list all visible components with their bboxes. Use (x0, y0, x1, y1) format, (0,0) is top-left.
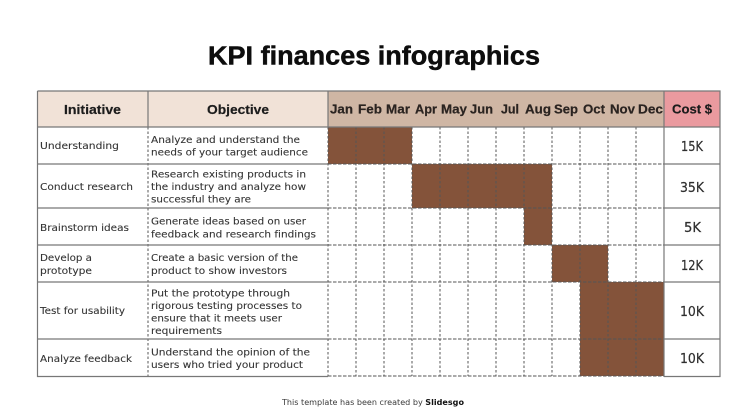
initiative column: Understanding (40, 141, 119, 152)
initiative column: Test for usability (39, 306, 125, 317)
objective column: Analyze and understand the (151, 135, 300, 146)
objective column: Create a basic version of the (151, 253, 298, 264)
cost column (680, 140, 704, 367)
cost column: 10K (680, 305, 704, 320)
header row: Sep (554, 102, 578, 116)
gantt bars (328, 127, 664, 376)
header row: Nov (610, 102, 635, 116)
initiative column: Brainstorm ideas (40, 223, 129, 234)
header row: Mar (386, 102, 410, 116)
initiative column: prototype (40, 266, 92, 277)
objective column: Put the prototype through (151, 288, 290, 300)
cost column: 35K (680, 181, 704, 196)
objective column: Generate ideas based on user (151, 216, 307, 228)
objective column: product to show investors (151, 266, 287, 277)
cost column: 12K (681, 259, 703, 274)
table borders (38, 91, 720, 376)
header row: Jun (470, 102, 493, 116)
header row: Initiative (64, 102, 121, 117)
header row: May (441, 102, 467, 116)
objective column: Understand the opinion of the (151, 348, 310, 358)
objective column: ensure that it meets user (151, 314, 283, 324)
header row: Jan (330, 102, 353, 116)
objective column: users who tried your product (151, 360, 303, 371)
panel: gantt table (38, 91, 720, 376)
objective column: requirements (151, 326, 222, 337)
initiative column: Analyze feedback (40, 354, 132, 365)
objective column: Research existing products in (151, 170, 306, 180)
dashed grid (148, 127, 664, 376)
header row: Aug (525, 102, 551, 116)
header row: Apr (415, 102, 437, 116)
header row: Feb (358, 102, 382, 116)
initiative column: Develop a (40, 253, 92, 264)
objective column: feedback and research findings (151, 230, 316, 240)
objective column: successful they are (151, 194, 251, 206)
header row: Jul (501, 102, 519, 116)
cost column: 5K (684, 221, 701, 236)
header row: Oct (583, 102, 606, 116)
footer credit: This template has been created by Slidesgo (281, 398, 464, 407)
title: KPI finances infographics (208, 42, 540, 70)
objective column: rigorous testing processes to (151, 301, 302, 312)
objective column (151, 135, 316, 371)
cost column: 10K (680, 352, 704, 367)
initiative column: Conduct research (40, 182, 133, 193)
objective column: the industry and analyze how (151, 182, 306, 193)
objective column: needs of your target audience (151, 148, 308, 158)
initiative column (39, 141, 133, 365)
header row: Dec (638, 102, 663, 116)
header row: Objective (207, 102, 269, 117)
header row: Cost $ (672, 102, 713, 116)
header row (38, 91, 720, 127)
cost column: 15K (681, 140, 703, 155)
